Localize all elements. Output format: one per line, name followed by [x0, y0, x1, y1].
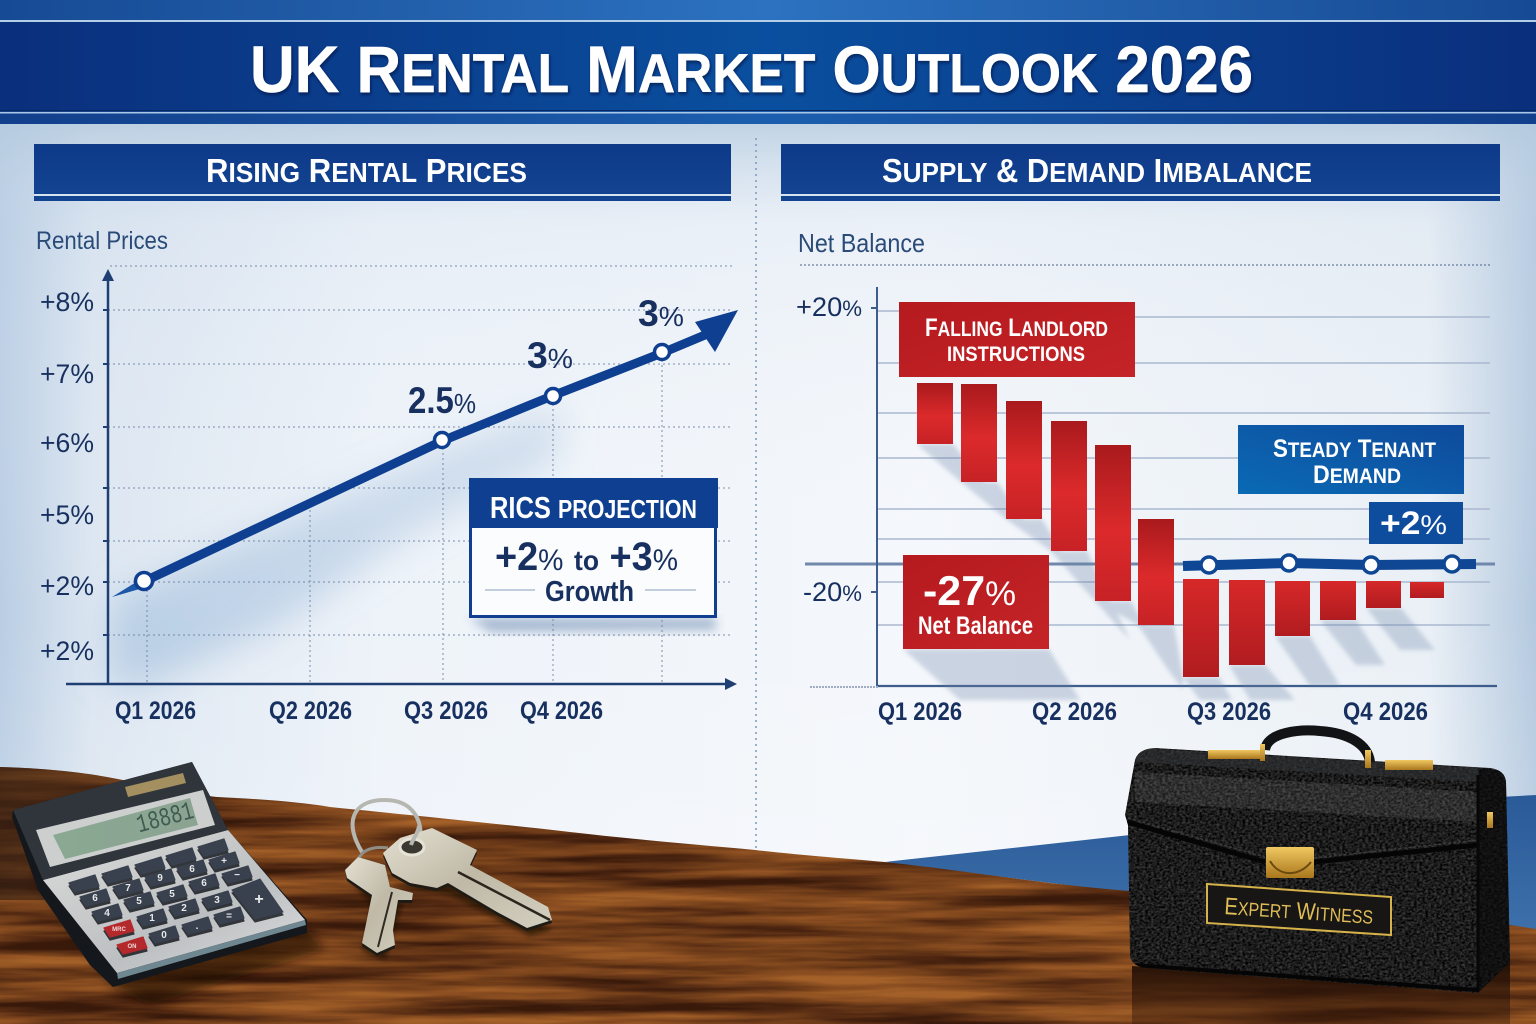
keypad: 0 — [161, 930, 167, 941]
keypad: 6 — [92, 893, 98, 904]
briefcase — [1120, 730, 1520, 1024]
trend arrow — [112, 310, 738, 597]
section heading: supply and demand: SUPPLY & DEMAND IMBALANCE — [882, 152, 1312, 189]
axis title: net balance: Net Balance — [798, 228, 925, 258]
keypad: 4 — [104, 908, 110, 919]
x axis — [810, 686, 1497, 687]
dark top panel — [13, 762, 228, 880]
key: small — [345, 857, 413, 956]
briefcase reflection — [1132, 960, 1510, 1024]
keypad: + — [254, 891, 264, 908]
solar panel — [125, 773, 186, 797]
data points — [136, 344, 670, 590]
y axis labels: +5% — [40, 500, 94, 530]
wooden desk — [0, 760, 1536, 1024]
key: large — [383, 826, 552, 931]
axis title: rental prices: Rental Prices — [36, 227, 168, 255]
section heading: rising rental prices: RISING RENTAL PRICES — [206, 152, 527, 189]
keypad: 3 — [214, 895, 220, 906]
section heading: supply and demand — [781, 144, 1500, 201]
callout: steady tenant demand — [1238, 425, 1464, 494]
y axis — [102, 269, 114, 684]
x axis labels: Q1 2026 — [878, 698, 962, 726]
callout: -27% net balance: Net Balance — [918, 612, 1033, 640]
y axis labels: +2% — [40, 636, 94, 666]
keypad: 6 — [189, 864, 195, 875]
data labels: 3% — [638, 293, 684, 334]
keypad: + — [221, 856, 227, 867]
bar chart: net balance — [796, 287, 1497, 726]
keypad: . — [196, 921, 199, 932]
y axis labels: +8% — [40, 287, 94, 317]
display bezel — [36, 790, 215, 867]
keypad — [69, 839, 283, 957]
y axis labels: +20% — [796, 292, 862, 322]
x axis labels: Q4 2026 — [520, 697, 603, 725]
clasp — [1266, 847, 1314, 878]
data labels: 3% — [527, 335, 573, 376]
keypad: MRC — [112, 927, 126, 933]
keypad: = — [226, 911, 232, 922]
bars — [917, 383, 1444, 677]
line chart: rental prices — [40, 266, 738, 725]
callout: -27% net balance: -27% — [923, 567, 1016, 614]
keypad: 7 — [125, 883, 131, 894]
keypad: 1 — [149, 913, 155, 924]
x axis labels: Q4 2026 — [1343, 698, 1428, 726]
calculator base — [12, 762, 307, 987]
lcd display — [53, 798, 198, 859]
centre divider — [755, 138, 757, 850]
x axis — [66, 678, 737, 690]
callout: falling landlord instructions — [899, 302, 1135, 377]
calculator shadow — [30, 870, 325, 1005]
area shadow under line — [108, 405, 560, 684]
x axis labels — [878, 698, 1428, 726]
title banner — [0, 0, 1536, 124]
y axis labels — [40, 287, 94, 666]
keypad: ON — [128, 944, 136, 950]
keypad: − — [234, 870, 240, 881]
x axis labels: Q3 2026 — [1187, 698, 1271, 726]
callout: +2%: +2% — [1380, 505, 1447, 541]
name plate — [1207, 884, 1391, 935]
y axis labels: +7% — [40, 359, 94, 389]
y axis labels: -20% — [803, 577, 862, 607]
calculator — [12, 762, 325, 1005]
keypad: 6 — [201, 878, 207, 889]
callout: +2% — [1369, 502, 1463, 544]
key shadow — [350, 880, 552, 960]
callout: rics projection: RICS PROJECTION — [490, 490, 697, 525]
callout: falling landlord instructions: INSTRUCTIONS — [947, 342, 1085, 366]
calculator: 18881 — [133, 796, 197, 840]
keypad: 2 — [181, 903, 187, 914]
keypad: 5 — [169, 889, 175, 900]
data labels — [408, 293, 684, 421]
keypad: 5 — [136, 896, 142, 907]
y axis labels: +2% — [40, 571, 94, 601]
title: UK RENTAL MARKET OUTLOOK 2026 — [250, 32, 1253, 106]
x axis labels: Q2 2026 — [1032, 698, 1117, 726]
callout: rics projection: +2% to +3% — [495, 535, 678, 579]
y axis labels — [796, 292, 862, 607]
data labels: 2.5% — [408, 380, 476, 421]
side strap buckle — [1487, 812, 1493, 828]
x axis labels: Q1 2026 — [115, 697, 196, 725]
name plate: EXPERT WITNESS — [1224, 893, 1374, 930]
x axis labels: Q3 2026 — [404, 697, 488, 725]
panel: rising rental prices — [34, 144, 738, 725]
callout: -27% net balance — [903, 555, 1049, 649]
y axis — [871, 287, 877, 686]
callout: steady tenant demand: DEMAND — [1313, 461, 1401, 489]
callout: steady tenant demand: STEADY TENANT — [1273, 435, 1436, 463]
keypad: 9 — [157, 873, 163, 884]
demand line — [1183, 555, 1476, 573]
bar shadows — [903, 444, 1435, 700]
x axis labels: Q2 2026 — [269, 697, 352, 725]
keys — [345, 800, 552, 960]
callout: rics projection — [469, 478, 718, 632]
handle — [1208, 730, 1433, 770]
y axis labels: +6% — [40, 428, 94, 458]
callout: falling landlord instructions: FALLING LANDLORD — [925, 314, 1108, 342]
x axis labels — [115, 697, 603, 725]
section heading: rising rental prices — [34, 144, 731, 201]
key ring — [353, 800, 420, 860]
panel: supply and demand imbalance — [781, 144, 1500, 726]
blue folder — [885, 795, 1536, 930]
zero line — [805, 562, 1495, 566]
silver keypad panel — [43, 830, 305, 973]
callout: rics projection: Growth — [545, 576, 634, 608]
